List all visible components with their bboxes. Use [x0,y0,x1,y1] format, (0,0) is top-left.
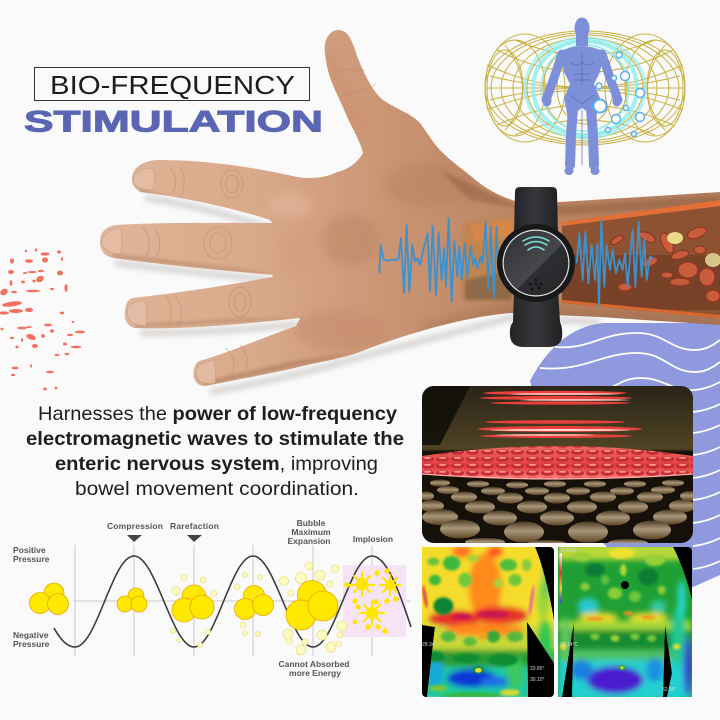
chart labels: Pressure [13,554,50,564]
thermal readouts: 33.85° [530,666,545,672]
finger nails [102,168,216,384]
exposed tissue beside watch [462,218,515,300]
chart labels [13,518,393,678]
yellow bubble clusters [30,580,338,630]
bubble pressure wave chart [13,518,411,678]
implosion pink zone [343,565,406,637]
gold toroidal wireframe [485,31,685,145]
decorative periwinkle wave shape [530,323,720,587]
chart grid [73,545,411,656]
speaker holes [529,279,542,290]
data bubbles [594,52,644,136]
implosion splats [345,569,400,633]
wifi signal arcs [523,237,549,250]
skin tone shading [113,40,720,386]
chart labels: more Energy [289,668,341,678]
hand and forearm [100,30,720,392]
soft shadows under fingers [115,198,600,392]
description text: bowel movement coordination. [75,478,359,500]
red glowing bubble band [422,446,693,479]
lens rows [422,480,693,543]
chart labels: Expansion [288,536,330,546]
body energy field figure [485,18,685,175]
pale satellite bubbles [170,562,347,655]
chart labels: Maximum [291,527,331,537]
chart labels: Pressure [13,639,50,649]
human figure [542,18,622,175]
strap [514,187,558,235]
blue bio-frequency waveform [379,218,653,307]
phase markers [127,535,202,542]
chart labels: Bubble [297,518,326,528]
red blood cells [610,225,720,302]
hand silhouette [100,30,720,386]
knuckle wrinkles [142,70,376,375]
blood vessel cutaway [562,200,720,318]
chart labels: Compression [107,521,163,531]
title box: Bio-Frequency: BIO-FREQUENCY [50,70,295,100]
title [24,68,323,138]
thermal readouts: 29.14°C [560,642,579,648]
thermal readouts: 28.34 [422,642,435,648]
thermal readouts: 30.10° [530,677,545,683]
chart labels: Cannot Absorbed [278,659,350,669]
description text: enteric nervous system , improving [55,453,378,475]
chart labels: Negative [13,630,49,640]
thermal readouts: 35.34°C [559,548,578,554]
smart wristband watch [497,187,575,347]
description text [26,403,404,500]
red light streaks [478,391,642,438]
photo: magnetic wave over lens array [418,386,700,548]
thermal image: before (left) [422,547,554,697]
title word: Stimulation: STIMULATION [24,106,323,138]
description text: Harnesses the power of low-frequency [38,403,397,425]
thermal image: after (right) [558,547,692,697]
thermal readouts: 32.95° [662,687,677,693]
thermal readouts [559,548,677,693]
temperature scale bar [560,553,562,603]
cyan energy rings [525,38,645,138]
description text: electromagnetic waves to stimulate the [26,428,404,450]
pressure sine wave [54,556,411,647]
chart labels: Rarefaction [170,521,219,531]
chart labels: Implosion [353,534,393,544]
coral dust splatter [0,248,85,390]
chart labels: Positive [13,545,46,555]
watch face [504,231,568,295]
watch case [497,224,575,302]
thermal readouts [422,642,545,683]
